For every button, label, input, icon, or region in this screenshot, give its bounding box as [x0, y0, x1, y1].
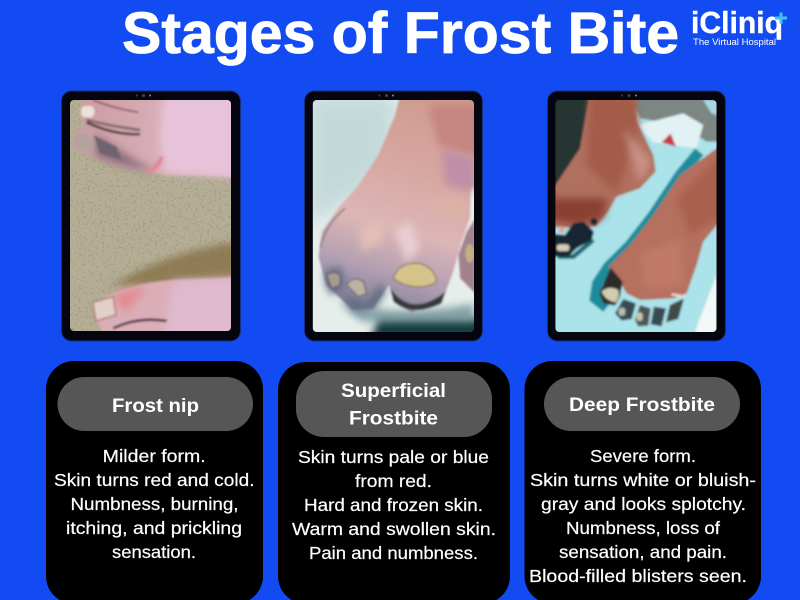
panel: deep frostbite card — [524, 361, 761, 600]
lower foot — [608, 142, 727, 300]
upper foot dark toes — [547, 222, 594, 257]
panel: superficial frostbite photo tablet — [304, 90, 483, 342]
text block: frost nip description — [54, 446, 254, 562]
lower foot dark toes — [599, 268, 623, 306]
bottom foot — [96, 276, 231, 331]
logo: iCliniq: iCliniq — [691, 5, 783, 40]
panel: superficial frostbite card — [278, 362, 510, 600]
pill heading: frost nip: Frost nip — [112, 395, 199, 417]
upper foot — [555, 100, 657, 229]
panel: frost nip photo tablet — [61, 90, 241, 342]
pill heading: deep frostbite — [544, 377, 740, 431]
pill heading: superficial frostbite: Superficial — [341, 380, 446, 402]
text block: superficial frostbite description: Hard and frozen skin. — [304, 495, 483, 515]
top foot — [72, 100, 231, 177]
pill heading: superficial frostbite: Frostbite — [349, 408, 438, 430]
text block: frost nip description: Skin turns red and cold. — [54, 470, 254, 490]
text block: frost nip description: Milder form. — [103, 446, 206, 466]
text block: superficial frostbite description: from red. — [355, 471, 432, 491]
text block: frost nip description: Numbness, burning, — [70, 494, 239, 514]
text block: frost nip description: itching, and prickling — [66, 518, 242, 538]
icon: logo plus — [775, 12, 787, 24]
text block: deep frostbite description: Skin turns white or bluish- — [530, 470, 756, 490]
title: Stages of Frost Bite — [122, 1, 679, 66]
text block: deep frostbite description: gray and looks splotchy. — [541, 494, 746, 514]
photo: pale bluish foot — [312, 100, 474, 332]
right neighbouring toe — [458, 218, 475, 293]
main foot — [318, 95, 482, 312]
text block: superficial frostbite description — [292, 447, 496, 563]
text block: deep frostbite description: Numbness, loss of — [566, 518, 720, 538]
logo: iCliniq: The Virtual Hospital — [693, 37, 776, 47]
pill heading: superficial frostbite — [296, 371, 492, 437]
text block: deep frostbite description: sensation, and pain. — [559, 542, 727, 562]
text block: deep frostbite description: Severe form. — [590, 446, 696, 466]
text block: frost nip description: sensation. — [112, 542, 196, 562]
pill heading: deep frostbite: Deep Frostbite — [569, 394, 715, 416]
text block: deep frostbite description: Blood-filled blisters seen. — [529, 566, 747, 586]
panel: frost nip card — [46, 361, 263, 600]
panel: deep frostbite photo tablet — [547, 90, 726, 342]
text block: superficial frostbite description: Pain and numbness. — [309, 543, 478, 563]
text block: superficial frostbite description: Warm and swollen skin. — [292, 519, 496, 539]
toes — [325, 267, 387, 312]
teal shadow outlines — [595, 152, 699, 308]
photo: dark blistered toes on blue sheet — [555, 100, 717, 332]
text block: superficial frostbite description: Skin turns pale or blue — [298, 447, 489, 467]
pill heading: frost nip — [58, 377, 253, 431]
text block: deep frostbite description — [529, 446, 756, 586]
photo: toes with frost nip — [70, 100, 231, 331]
